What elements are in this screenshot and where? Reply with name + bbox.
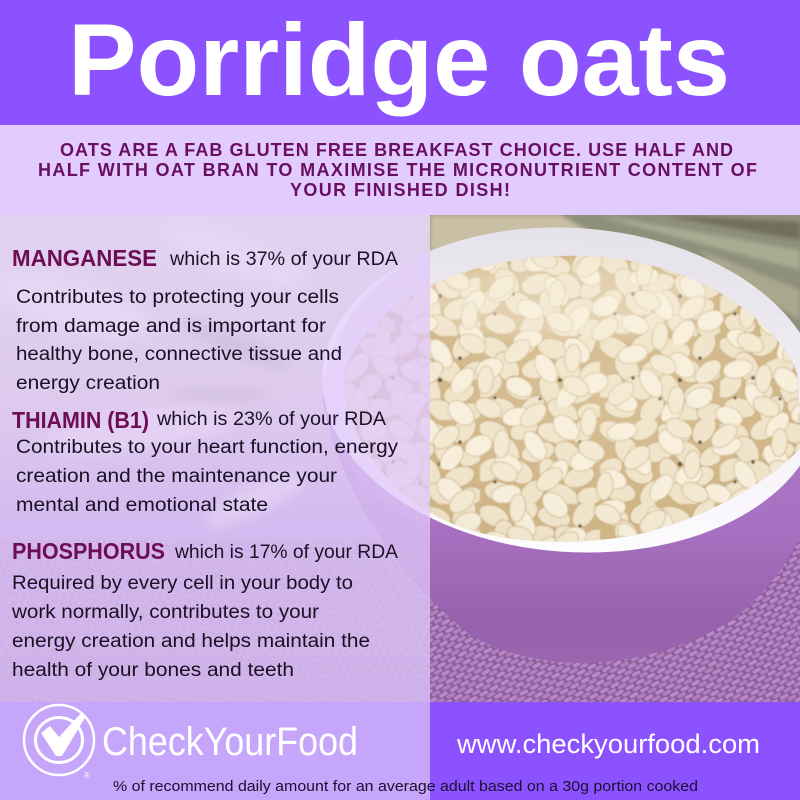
bowl body: [322, 395, 800, 663]
thiamin description: mental and emotional state: [16, 495, 268, 516]
thiamin RDA: which is 23% of your RDA: [156, 409, 386, 430]
thiamin heading: THIAMIN (B1): [12, 407, 149, 433]
website url: www.checkyourfood.com: [456, 729, 760, 759]
title banner: [0, 0, 800, 125]
footer band: [0, 702, 800, 800]
intro text: [38, 140, 757, 200]
phosphorus description: [11, 573, 370, 681]
blurred wheat ears: [0, 212, 312, 536]
intro text: HALF WITH OAT BRAN TO MAXIMISE THE MICRONUTRIENT CONTENT OF: [38, 160, 757, 180]
oat flakes: [344, 256, 800, 542]
manganese description: [16, 287, 342, 394]
logo wordmark: CheckYourFood: [102, 720, 358, 764]
phosphorus heading: PHOSPHORUS: [12, 538, 165, 564]
manganese RDA: which is 37% of your RDA: [169, 249, 398, 270]
manganese description: from damage and is important for: [16, 316, 327, 337]
manganese description: healthy bone, connective tissue and: [16, 344, 342, 365]
left translucent text panel: [0, 215, 430, 702]
phosphorus description: health of your bones and teeth: [12, 660, 294, 681]
phosphorus RDA: which is 17% of your RDA: [174, 542, 398, 563]
phosphorus description: work normally, contributes to your: [11, 602, 320, 623]
manganese description: Contributes to protecting your cells: [16, 287, 339, 308]
bowl rim: [311, 211, 800, 569]
title: Porridge oats: [68, 3, 730, 117]
photo backdrop: wheat stalks and table: [0, 212, 800, 702]
thiamin description: Contributes to your heart function, energy: [16, 437, 399, 458]
intro banner: [0, 125, 800, 215]
phosphorus description: Required by every cell in your body to: [12, 573, 353, 594]
icon: check circle: [24, 705, 94, 775]
phosphorus description: energy creation and helps maintain the: [12, 631, 370, 652]
nutrient: manganese: [12, 245, 398, 394]
footnote: % of recommend daily amount for an average adult based on a 30g portion cooked: [113, 778, 698, 795]
thiamin description: [16, 437, 399, 516]
registered mark: ®: [84, 771, 90, 780]
background photo: oats in a purple bowl: [0, 211, 800, 702]
logo: CheckYourFood: [24, 705, 358, 780]
bowl tint under panel: [322, 252, 430, 525]
nutrient: thiamin: [12, 407, 399, 516]
manganese heading: MANGANESE: [12, 245, 157, 271]
thiamin description: creation and the maintenance your: [16, 466, 338, 487]
intro text: OATS ARE A FAB GLUTEN FREE BREAKFAST CHOICE. USE HALF AND: [60, 140, 733, 160]
intro text: YOUR FINISHED DISH!: [290, 180, 510, 200]
manganese description: energy creation: [16, 373, 160, 394]
nutrient: phosphorus: [11, 538, 398, 681]
